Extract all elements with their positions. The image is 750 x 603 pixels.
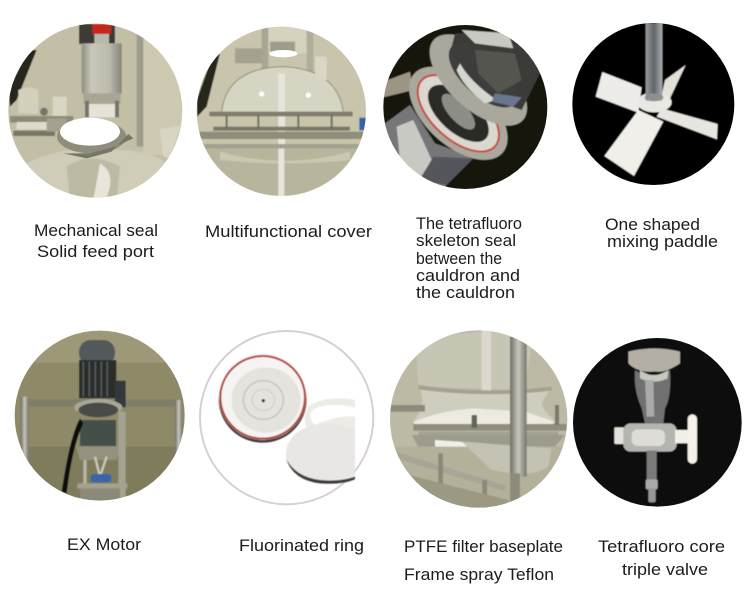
caption: PTFE filter baseplate [404,538,563,584]
caption: triple valve: triple valve [622,561,708,579]
photo: multifunctional cover [193,23,370,200]
caption: EX motor: EX Motor [67,536,142,554]
caption: triple valve: Tetrafluoro core [598,538,725,556]
panel: triple valve [572,337,743,579]
caption: multifunctional cover: Multifunctional cover [205,223,373,241]
photo: skeleton seal between cauldrons [382,18,550,192]
caption: fluorinated ring: Fluorinated ring [239,537,364,555]
photo: one shaped mixing paddle [570,22,737,187]
panel: tetrafluoro skeleton seal [382,18,550,302]
caption: skeleton seal: between the [416,250,502,268]
panel: mechanical seal [7,22,187,261]
caption: mixing paddle [605,216,718,251]
panel: PTFE filter baseplate [388,328,570,584]
photo: mechanical seal and solid feed port [7,22,187,200]
photo: tetrafluoro core triple valve [572,337,743,508]
caption: triple valve [598,538,725,579]
caption: skeleton seal: cauldron and [416,267,520,285]
panel: mixing paddle [570,22,737,251]
caption: skeleton seal: The tetrafluoro [416,215,522,233]
caption: PTFE filter baseplate: Frame spray Teflon [404,566,554,584]
panel: multifunctional cover [193,23,373,241]
photo: PTFE filter baseplate [388,328,570,510]
photo: EX motor [13,329,187,503]
panel: fluorinated ring [200,331,373,555]
caption: mechanical seal: Mechanical seal [34,222,158,240]
caption: mechanical seal: Solid feed port [37,243,154,261]
caption: skeleton seal: the cauldron [416,284,515,302]
caption: mixing paddle: One shaped [605,216,700,234]
caption: mixing paddle: mixing paddle [607,233,718,251]
caption: mechanical seal [34,222,158,261]
panel: EX motor [13,329,187,554]
photo: fluorinated ring [200,331,373,504]
caption: skeleton seal [416,215,522,302]
caption: PTFE filter baseplate: PTFE filter baseplate [404,538,563,556]
caption: skeleton seal: skeleton seal [416,232,516,250]
